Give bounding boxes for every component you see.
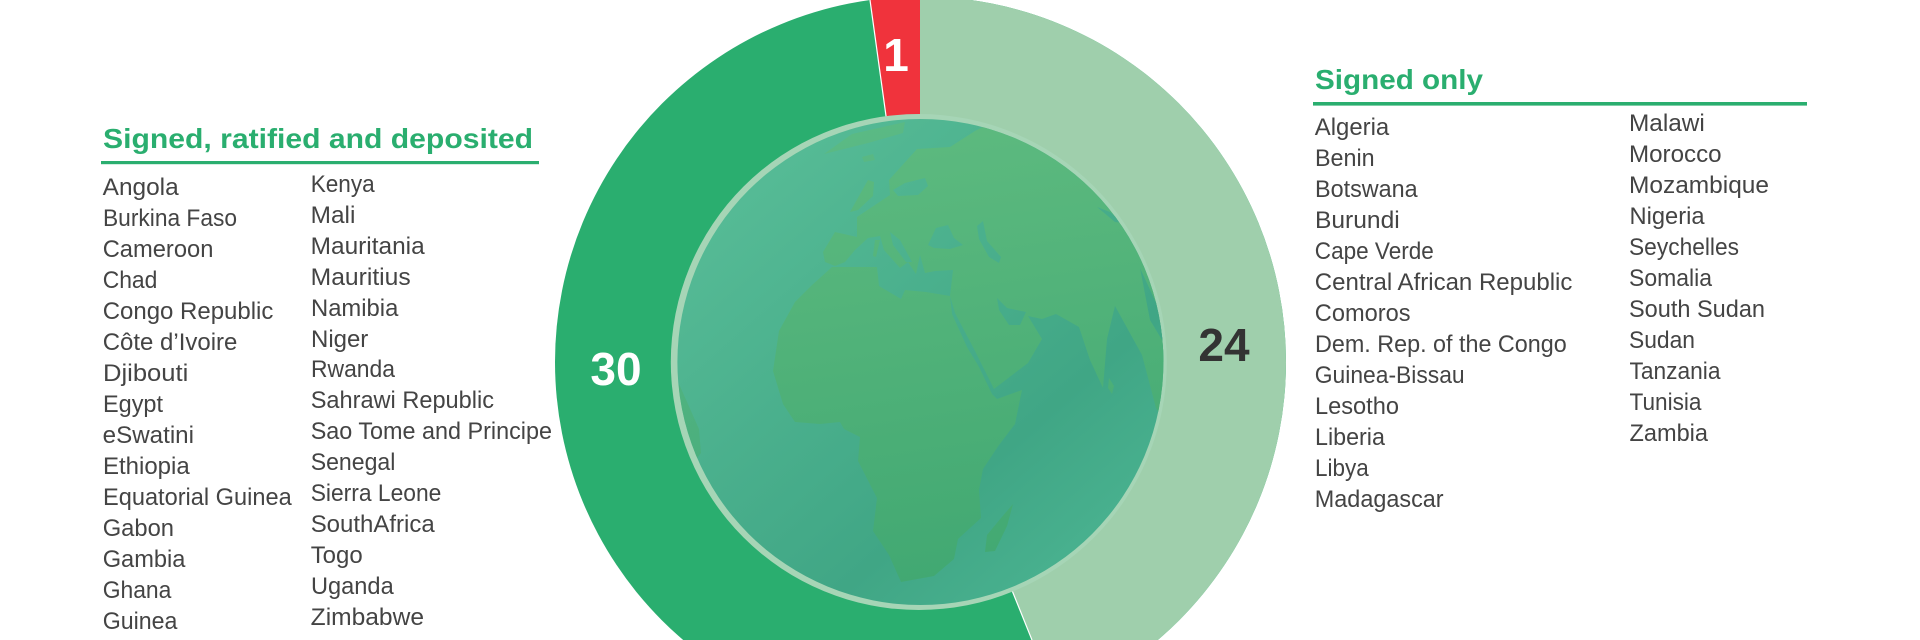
country list column 2: Sahrawi Republic (311, 387, 494, 414)
panel: signed only (1313, 64, 1807, 513)
country list column 1: Egypt (103, 391, 163, 418)
segment: signed, ratified and deposited (30) (555, 0, 1286, 640)
country list column 2: Togo (311, 542, 363, 569)
country list column 1: Djibouti (103, 360, 188, 387)
country list column 2: Morocco (1629, 141, 1722, 168)
country list column 2: Nigeria (1630, 203, 1705, 230)
heading: Signed, ratified and deposited (103, 123, 533, 154)
country list column 2: Rwanda (311, 356, 396, 383)
segment: signed only (24) (920, 0, 1290, 640)
country list column 2: Mali (311, 202, 355, 229)
Caspian Sea (977, 221, 1001, 263)
Corsica and Sardinia (873, 240, 880, 257)
East Asian seas (1097, 207, 1165, 345)
donut chart (555, 0, 1290, 640)
country list column 2: Niger (311, 326, 368, 353)
country list column 2: Somalia (1629, 265, 1713, 292)
country list column 1: Madagascar (1315, 486, 1444, 513)
Eurasia (823, 127, 1164, 412)
country list column 2: Zimbabwe (311, 604, 424, 631)
country list column 2 (311, 171, 552, 631)
country list column 2: Seychelles (1629, 234, 1739, 261)
country list column 2: Sudan (1629, 327, 1695, 354)
country list column 2: SouthAfrica (311, 511, 435, 538)
panel: signed, ratified and deposited (101, 123, 552, 635)
country list column 2 (1629, 110, 1769, 447)
Madagascar (985, 504, 1013, 552)
country list column 2: Uganda (311, 573, 394, 600)
country list column 2: Tunisia (1630, 389, 1702, 416)
country list column 1: Congo Republic (103, 298, 273, 325)
country list column 2: Tanzania (1630, 358, 1721, 385)
country list column 1: Côte d’Ivoire (103, 329, 237, 356)
country list column 2: Sierra Leone (311, 480, 441, 507)
country list column 2: Senegal (311, 449, 395, 476)
country list column 1 (1315, 114, 1572, 513)
country list column 2: Zambia (1630, 420, 1709, 447)
country list column 2: Malawi (1629, 110, 1705, 137)
Black Sea (928, 225, 963, 249)
country list column 1: Botswana (1315, 176, 1418, 203)
Persian Gulf (997, 298, 1026, 325)
country list column 1: Benin (1315, 145, 1375, 172)
country list column 1: Gabon (103, 515, 174, 542)
country list column 2: South Sudan (1629, 296, 1765, 323)
country list column 2: Sao Tome and Principe (311, 418, 552, 445)
South America (679, 384, 701, 461)
globe (671, 114, 1170, 610)
country list column 1: Equatorial Guinea (103, 484, 292, 511)
country list column 1: Lesotho (1315, 393, 1399, 420)
country list column 1: Ethiopia (103, 453, 190, 480)
country list column 1: Angola (103, 174, 179, 201)
country list column 1: Algeria (1315, 114, 1390, 141)
value: 1: 1 (883, 29, 909, 81)
country list column 1: Burundi (1315, 207, 1400, 234)
country list column 2: Mauritania (311, 233, 425, 260)
Africa (773, 267, 1022, 582)
land masses (679, 118, 1170, 582)
country list column 1: Cape Verde (1315, 238, 1434, 265)
country list column 2: Mauritius (311, 264, 411, 291)
Baltic (893, 178, 928, 196)
Greenland and Iceland (824, 122, 905, 162)
segment: red (1) (870, 0, 920, 116)
country list column 1: Guinea-Bissau (1315, 362, 1465, 389)
Britain (850, 180, 874, 212)
value: 30: 30 (590, 343, 642, 395)
Adriatic (890, 232, 912, 262)
country list column 1: Gambia (103, 546, 186, 573)
country list column 1: Central African Republic (1315, 269, 1572, 296)
country list column 1 (103, 174, 292, 635)
country list column 1: Liberia (1315, 424, 1386, 451)
Sri Lanka (1108, 378, 1114, 394)
country list column 1: Guinea (103, 608, 178, 635)
country list column 1: Comoros (1315, 300, 1410, 327)
country list column 1: eSwatini (103, 422, 194, 449)
country list column 1: Chad (103, 267, 157, 294)
country list column 1: Burkina Faso (103, 205, 237, 232)
value: 24: 24 (1198, 319, 1250, 371)
country list column 1: Dem. Rep. of the Congo (1315, 331, 1567, 358)
country list column 1: Ghana (103, 577, 172, 604)
country list column 1: Libya (1315, 455, 1369, 482)
heading: Signed only (1315, 64, 1483, 95)
country list column 2: Kenya (311, 171, 375, 198)
country list column 2: Namibia (311, 295, 399, 322)
country list column 1: Cameroon (103, 236, 213, 263)
country list column 2: Mozambique (1629, 172, 1769, 199)
